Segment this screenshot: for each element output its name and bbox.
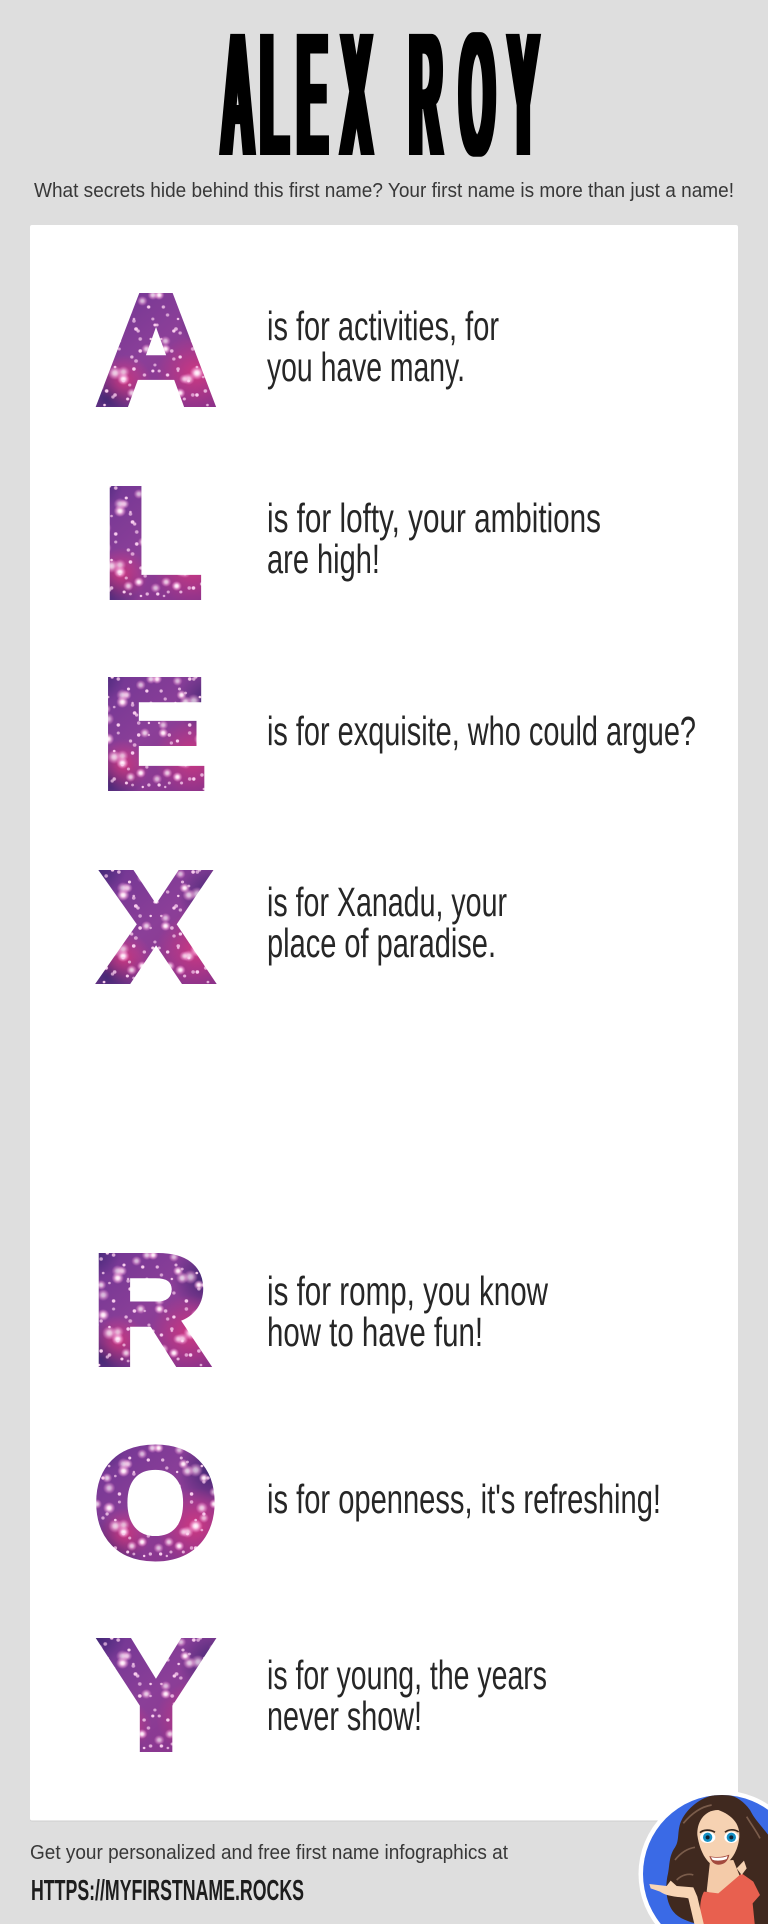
row: A	[98, 265, 499, 436]
text: X: is for Xanadu, your	[267, 879, 507, 925]
row: R	[92, 1225, 548, 1396]
shirt	[700, 1873, 760, 1924]
smile	[709, 1855, 729, 1865]
letter X: X	[102, 840, 210, 1013]
text: A: is for activities, for	[267, 303, 499, 349]
row: O	[94, 1417, 661, 1589]
text: L: are high!	[267, 536, 380, 582]
text: X	[267, 879, 507, 966]
text: R: is for romp, you know	[267, 1268, 548, 1314]
row: L	[103, 458, 601, 629]
row: E	[102, 647, 696, 820]
text: L	[267, 495, 601, 582]
text: Y: is for young, the years	[267, 1652, 547, 1698]
title: ALEX ROY	[221, 0, 538, 193]
footer url: HTTPS://MYFIRSTNAME.ROCKS	[31, 1875, 304, 1907]
raised hand and arm	[649, 1881, 704, 1924]
text: A	[267, 303, 499, 390]
face	[697, 1810, 739, 1867]
text: R: how to have fun!	[267, 1309, 483, 1355]
letter Y: Y	[101, 1609, 211, 1781]
subtitle: What secrets hide behind this first name? Your first name is more than just a name!	[34, 180, 734, 202]
row: X	[102, 840, 507, 1013]
letter A: A	[98, 265, 214, 436]
neck and chest	[707, 1860, 740, 1897]
letter O: O	[94, 1417, 217, 1589]
text: L: is for lofty, your ambitions	[267, 495, 601, 541]
panel: letters	[30, 225, 738, 1822]
text: R	[267, 1268, 548, 1355]
hair	[666, 1794, 768, 1924]
letter L: L	[103, 458, 202, 629]
text: Y	[267, 1652, 547, 1739]
text: Y: never show!	[267, 1693, 422, 1739]
footer text: Get your personalized and free first name infographics at	[30, 1842, 508, 1864]
letter E: E	[102, 647, 206, 820]
text: X: place of paradise.	[267, 920, 496, 966]
row: Y	[101, 1609, 547, 1781]
eyes	[700, 1832, 715, 1843]
text: A: you have many.	[267, 344, 465, 390]
icon: avatar	[638, 1790, 768, 1924]
letter R: R	[92, 1225, 208, 1396]
hand on neck	[737, 1861, 747, 1875]
